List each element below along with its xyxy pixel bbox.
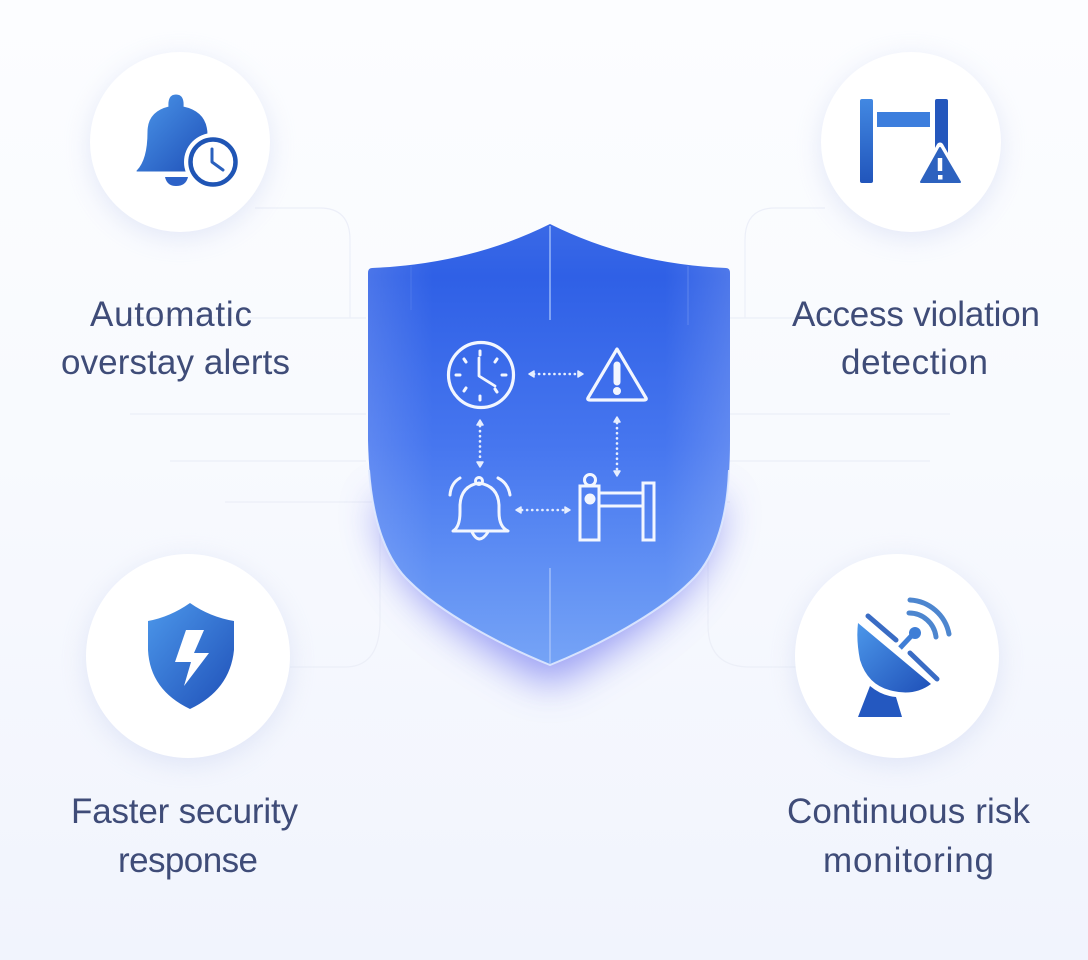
icon: bell with clock [137, 95, 242, 191]
circle: security response [86, 554, 290, 764]
label: Faster security response: response [118, 841, 258, 880]
label: Access violation detection: detection [841, 343, 988, 382]
label: Continuous risk monitoring: monitoring [823, 841, 994, 880]
icon: gate with warning [860, 99, 961, 183]
circle: access violation [821, 52, 1001, 238]
label: Automatic overstay alerts: overstay alerts [61, 343, 290, 382]
label: Faster security response: Faster security [71, 792, 298, 831]
dotted arrows [477, 371, 620, 513]
label: Access violation detection [792, 295, 1040, 382]
central shield [368, 224, 730, 685]
label: Continuous risk monitoring: Continuous risk [787, 792, 1030, 831]
icon: ringing bell [450, 478, 510, 539]
label: Continuous risk monitoring [787, 792, 1030, 880]
icon: shield with lightning [148, 603, 234, 709]
circle: overstay alerts [90, 52, 270, 238]
label: Automatic overstay alerts: Automatic [90, 295, 252, 334]
icon: satellite dish [857, 600, 949, 717]
icon: warning triangle [588, 349, 646, 400]
label: Faster security response [71, 792, 298, 880]
circle: risk monitoring [795, 554, 999, 764]
icon: access gate [580, 474, 654, 540]
label: Access violation detection: Access violation [792, 295, 1040, 334]
icon: clock [448, 342, 514, 408]
label: Automatic overstay alerts [61, 295, 290, 382]
